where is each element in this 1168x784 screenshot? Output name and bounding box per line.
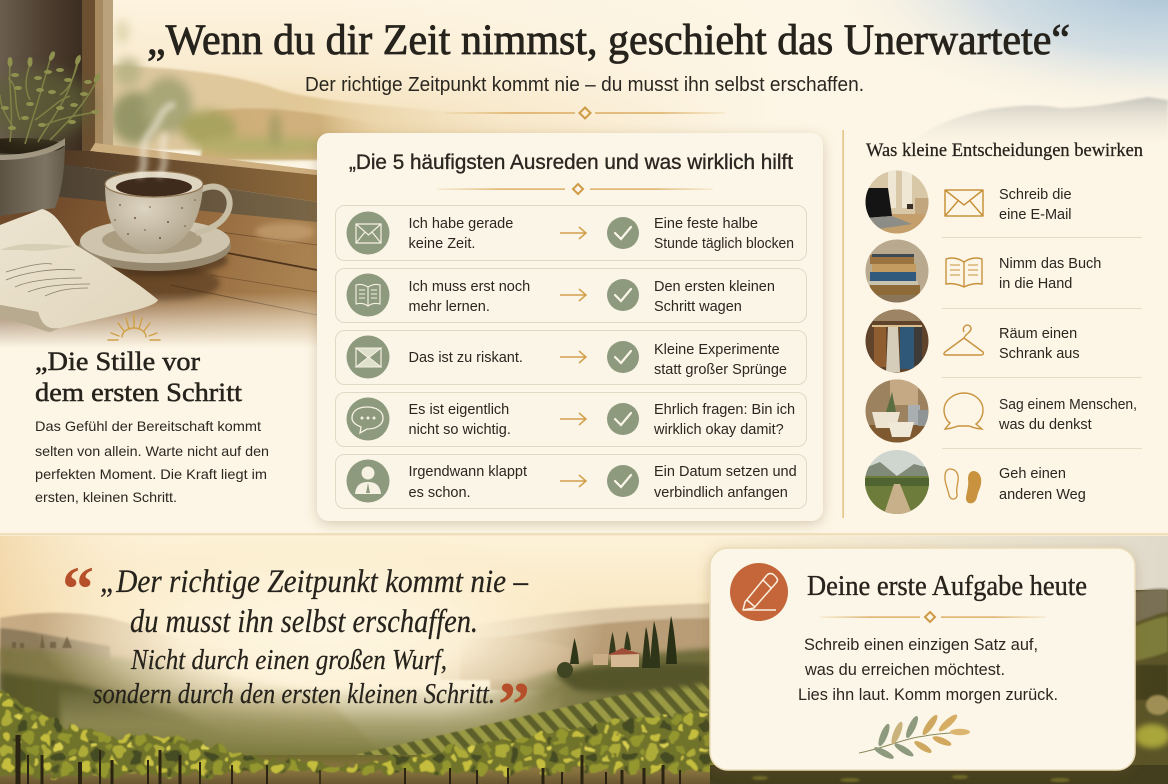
- item text: [999, 256, 1101, 292]
- photo: cups on a table: [865, 379, 929, 443]
- panel heading: „Die 5 häufigsten Ausreden und was wirklich hilft: [349, 151, 793, 174]
- section separator line: [0, 533, 1168, 536]
- arrow: [560, 475, 586, 487]
- coffee cup: [105, 171, 230, 254]
- page background: [0, 0, 1168, 535]
- solution text: Ein Datum setzen und: [654, 464, 797, 480]
- separator: [942, 237, 1142, 238]
- excuse text: Ich habe gerade: [408, 216, 513, 232]
- solution text: Ehrlich fragen: Bin ich: [654, 402, 795, 418]
- left village on the hill: [12, 634, 72, 648]
- excuse text: [408, 464, 527, 501]
- heading: [35, 346, 243, 407]
- row 1: [336, 206, 806, 260]
- solution text: Kleine Experimente: [654, 342, 780, 358]
- sky: [0, 536, 1168, 666]
- solution text: Schritt wagen: [654, 299, 742, 315]
- title: „Wenn du dir Zeit nimmst, geschieht das Unerwartete“: [147, 17, 1070, 64]
- photo: stack of books: [865, 239, 929, 303]
- potted plant: [0, 50, 102, 216]
- item text: was du denkst: [998, 417, 1092, 433]
- solution text: Den ersten kleinen: [654, 279, 775, 295]
- icon: pencil: [730, 563, 788, 621]
- vertical divider: [842, 130, 844, 518]
- village and cypress trees: [555, 616, 712, 692]
- item text: Räum einen: [999, 326, 1077, 342]
- heading: dem ersten Schritt: [35, 377, 243, 407]
- excuse text: mehr lernen.: [408, 299, 490, 315]
- photo: wardrobe: [865, 309, 929, 373]
- excuse text: Irgendwann klappt: [408, 464, 527, 480]
- quote line 2: du musst ihn selbst erschaffen.: [130, 604, 478, 640]
- item 3: [865, 309, 1080, 373]
- icon: envelope: [346, 212, 390, 254]
- icon: footprints: [945, 469, 981, 503]
- panel heading: Was kleine Entscheidungen bewirken: [866, 141, 1143, 161]
- item text: anderen Weg: [999, 487, 1086, 503]
- card body: Lies ihn laut. Komm morgen zurück.: [798, 685, 1058, 704]
- item 4: [865, 379, 1137, 443]
- card body: Schreib einen einzigen Satz auf,: [804, 635, 1038, 654]
- arrow: [560, 351, 586, 363]
- icon: person: [346, 460, 390, 502]
- panel: first task: [710, 548, 1135, 770]
- icon: hanger: [944, 325, 983, 355]
- icon: olive branch: [859, 712, 970, 761]
- panel: left text block: [35, 315, 269, 505]
- body text: selten von allein. Warte nicht auf den: [35, 443, 269, 459]
- body text: ersten, kleinen Schritt.: [35, 489, 177, 505]
- window sill: [50, 143, 317, 224]
- glow behind quote: [44, 572, 593, 720]
- item text: [999, 187, 1072, 223]
- card body: was du erreichen möchtest.: [804, 660, 1005, 679]
- heading: „Die Stille vor: [35, 346, 200, 376]
- icon: sun: [108, 315, 160, 340]
- item text: Schreib die: [999, 187, 1072, 203]
- solution text: [654, 216, 794, 252]
- body text: perfekten Moment. Die Kraft liegt im: [35, 466, 267, 482]
- arrow: [560, 227, 586, 239]
- right strip beside the card: [710, 589, 1168, 784]
- foreground vines: [0, 688, 725, 784]
- panel: excuses: [317, 133, 823, 521]
- ornament divider: [445, 108, 725, 118]
- excuse text: Es ist eigentlich: [408, 402, 509, 418]
- item text: [999, 326, 1080, 362]
- excuse text: [408, 279, 530, 315]
- item 5: [865, 450, 1086, 514]
- icon: check: [607, 465, 639, 497]
- icon: speech bubble: [944, 393, 983, 429]
- icon: check: [607, 279, 639, 311]
- excuse text: keine Zeit.: [408, 236, 475, 252]
- quote line 3: Nicht durch einen großen Wurf,: [130, 644, 447, 676]
- icon: speech bubbles: [346, 398, 390, 440]
- photo: path through fields: [865, 450, 929, 514]
- hazy valley below the quote: [58, 690, 556, 755]
- excuse text: [408, 216, 513, 252]
- excuse text: [408, 402, 511, 438]
- excuse text: nicht so wichtig.: [408, 422, 511, 438]
- quote line 4: sondern durch den ersten kleinen Schritt.: [93, 678, 495, 710]
- wooden table: [0, 195, 317, 350]
- panel background: [317, 133, 823, 521]
- solution text: [653, 402, 795, 438]
- divider: [437, 184, 713, 194]
- subtitle: Der richtige Zeitpunkt kommt nie – du musst ihn selbst erschaffen.: [305, 74, 864, 96]
- excuse text: Ich muss erst noch: [408, 279, 530, 295]
- wall and vertical window frame: [0, 0, 113, 175]
- quote line 1: „Der richtige Zeitpunkt kommt nie –: [100, 564, 528, 600]
- card heading: Deine erste Aufgabe heute: [807, 571, 1087, 602]
- separator: [942, 377, 1142, 378]
- closing quotation mark: ”: [498, 669, 530, 740]
- photo: vineyard landscape: [0, 522, 1168, 784]
- fade into cream: [0, 292, 317, 350]
- item text: in die Hand: [999, 276, 1072, 292]
- item 2: [865, 239, 1101, 303]
- body text: [35, 418, 269, 505]
- row 5: [336, 454, 806, 508]
- icon: book: [346, 274, 390, 316]
- photo: laptop on desk: [865, 170, 929, 234]
- row 2: [336, 268, 806, 322]
- distant hills: [0, 603, 720, 690]
- card body: [798, 635, 1058, 704]
- linen cloth with handwriting: [0, 209, 158, 332]
- opening quotation mark: “: [62, 553, 94, 624]
- solution text: statt großer Sprünge: [654, 362, 787, 378]
- steam: [140, 105, 172, 175]
- card background: [710, 548, 1135, 770]
- separator: [942, 448, 1142, 449]
- vineyard rows: [354, 682, 710, 755]
- background sky and mountains top right: [828, 0, 1168, 150]
- body text: Das Gefühl der Bereitschaft kommt: [35, 418, 261, 434]
- icon: check: [607, 217, 639, 249]
- item text: eine E-Mail: [999, 207, 1072, 223]
- solution text: [654, 342, 787, 378]
- solution text: [654, 279, 775, 315]
- item text: [998, 397, 1137, 433]
- window landscape: [100, 0, 800, 160]
- icon: open book: [946, 258, 982, 287]
- separator: [942, 308, 1142, 309]
- excuse text: es schon.: [408, 485, 471, 501]
- arrow: [560, 289, 586, 301]
- solution text: Stunde täglich blocken: [654, 236, 794, 252]
- item text: [999, 466, 1086, 503]
- solution text: wirklich okay damit?: [653, 422, 784, 438]
- item text: Sag einem Menschen,: [999, 397, 1137, 413]
- item text: Nimm das Buch: [999, 256, 1101, 272]
- divider: [820, 612, 1046, 622]
- solution text: verbindlich anfangen: [654, 485, 788, 501]
- icon: check: [607, 403, 639, 435]
- icon: check: [607, 341, 639, 373]
- panel: small decisions: [865, 141, 1143, 514]
- saucer: [79, 219, 231, 276]
- arrow: [560, 413, 586, 425]
- row 4: [336, 392, 806, 446]
- icon: envelope outline: [945, 190, 983, 216]
- item 1: [865, 170, 1072, 234]
- solution text: [654, 464, 797, 501]
- solution text: Eine feste halbe: [654, 216, 758, 232]
- row 3: [336, 330, 806, 384]
- item text: Schrank aus: [999, 346, 1080, 362]
- left mid slopes: [0, 646, 362, 746]
- right hillside: [460, 646, 710, 726]
- excuse text: Das ist zu riskant.: [408, 350, 523, 366]
- quote: [62, 553, 530, 740]
- item text: Geh einen: [999, 466, 1066, 482]
- photo: coffee cup at the window: [0, 0, 317, 350]
- icon: open envelope: [346, 336, 390, 378]
